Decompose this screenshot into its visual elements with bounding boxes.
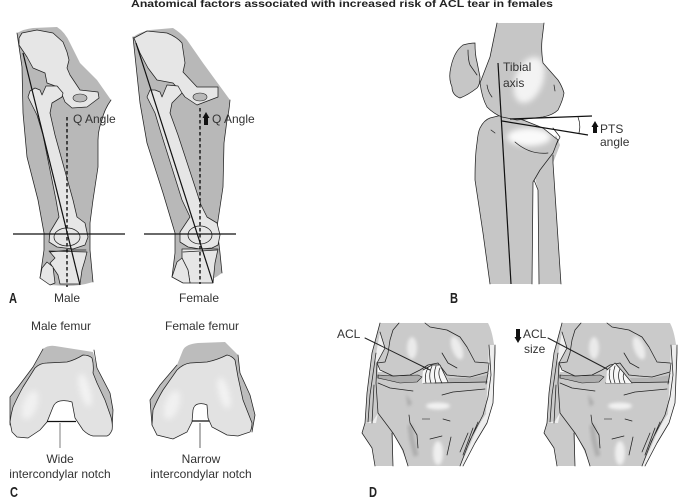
- label: Q Angle, female: Q Angle: [212, 112, 255, 126]
- label: Wide intercondylar notch: Wide: [46, 452, 74, 466]
- PTS angle lines: [502, 116, 592, 135]
- arrow: decreased ACL size: [514, 329, 522, 343]
- label: Q Angle, male: Q Angle: [73, 112, 116, 126]
- ACL leader line, left: [365, 338, 430, 370]
- label: Female: Female: [179, 291, 219, 305]
- label: Narrow intercondylar notch: Narrow: [182, 452, 220, 466]
- panel letter A: A: [9, 290, 17, 307]
- ACL leader line, right: [548, 338, 607, 369]
- tibial axis line: [498, 63, 511, 284]
- panel C: intercondylar notch: [9, 319, 255, 497]
- right knee with smaller ACL: [544, 323, 677, 466]
- label: Tibial axis: axis: [503, 76, 524, 90]
- label: ACL size: ACL: [523, 327, 546, 341]
- arrow: increased PTS: [592, 121, 598, 133]
- male femur: [10, 346, 113, 448]
- panel B: posterior tibial slope: [450, 23, 630, 307]
- panel D: ACL size: [337, 323, 677, 497]
- label: Male femur: Male femur: [31, 319, 91, 333]
- panel letter B: B: [450, 290, 458, 307]
- label: ACL size: size: [524, 342, 546, 356]
- male leg: [13, 27, 125, 287]
- left knee with larger ACL: [362, 323, 495, 466]
- label: Female femur: Female femur: [165, 319, 239, 333]
- tibia and fibula: [475, 115, 561, 284]
- label: PTS angle: angle: [600, 135, 630, 149]
- label: ACL: ACL: [337, 327, 361, 341]
- femur: [480, 23, 564, 120]
- label: PTS angle: PTS: [600, 122, 623, 136]
- female femur: [150, 342, 255, 448]
- panel A: Q angle: [9, 27, 255, 307]
- label: Tibial axis: Tibial: [503, 60, 531, 74]
- patella: [450, 43, 480, 98]
- label: Narrow intercondylar notch: intercondylar notch: [150, 467, 252, 481]
- female leg: [133, 28, 236, 284]
- label: Wide intercondylar notch: intercondylar notch: [9, 467, 111, 481]
- arrow: increased Q angle: [202, 112, 210, 125]
- label: Male: Male: [54, 291, 80, 305]
